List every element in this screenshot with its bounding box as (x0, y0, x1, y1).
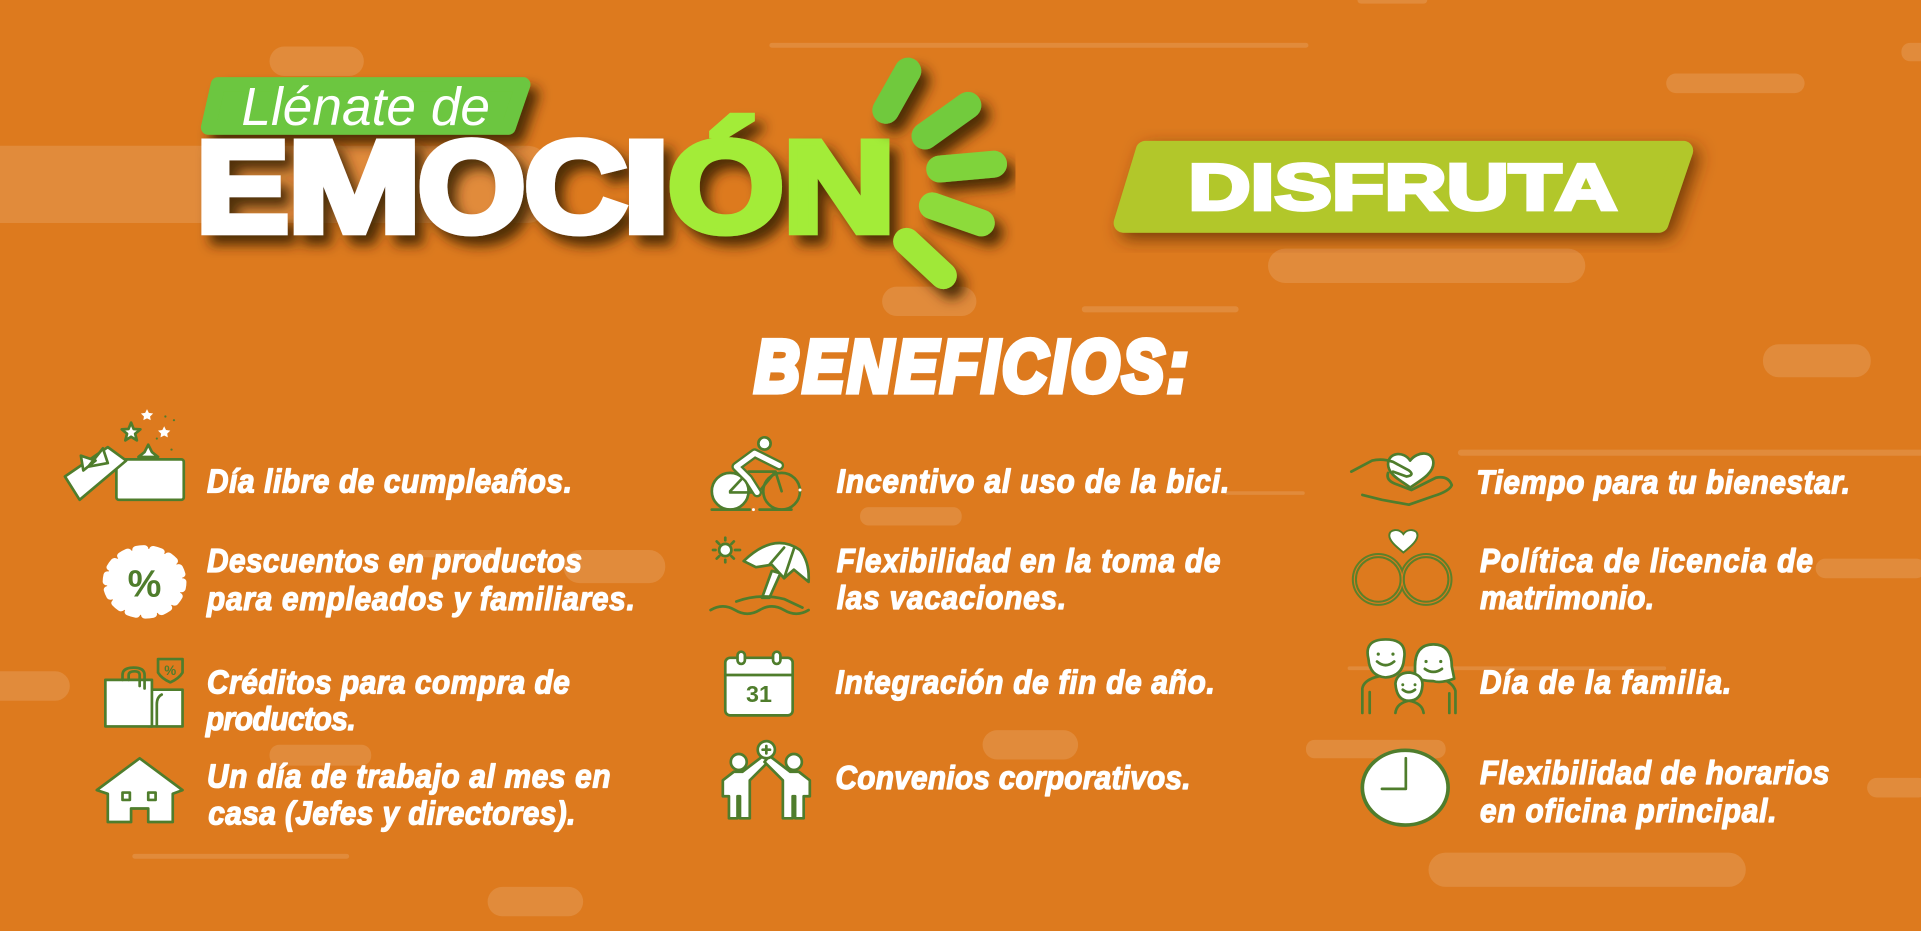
benefit: créditos (105, 659, 570, 737)
icon: percent badge: % (128, 564, 161, 606)
text: Convenios corporativos. (836, 759, 1191, 796)
text: casa (Jefes y directores). (208, 795, 575, 832)
wordmark: EMOCIÓN: C (524, 114, 627, 260)
icon: wedding rings with heart (1354, 530, 1450, 603)
benefit: vacaciones (711, 538, 1220, 616)
icon: heart in hand (1351, 454, 1452, 505)
text: Día de la familia. (1480, 664, 1731, 701)
wordmark: EMOCIÓN: M (288, 114, 421, 260)
text: Incentivo al uso de la bici. (837, 463, 1229, 500)
banner: Llénate de: Llénate de (241, 77, 490, 137)
icon: beach umbrella (711, 538, 809, 614)
icon: percent badge (107, 549, 182, 615)
text: productos. (205, 701, 356, 737)
benefit: bienestar (1351, 454, 1850, 505)
text: Un día de trabajo al mes en (207, 758, 611, 795)
text: Flexibilidad en la toma de (837, 543, 1220, 579)
icon: shopping bags (105, 659, 183, 726)
logo: Llénate de Emoción (196, 71, 994, 276)
text (206, 543, 635, 617)
benefit: convenios (723, 741, 1191, 818)
benefit: descuentos (107, 543, 635, 617)
text (1480, 755, 1829, 829)
text: Descuentos en productos (207, 543, 582, 579)
text (205, 664, 570, 737)
icon: house (97, 758, 183, 822)
benefit: horarios (1362, 750, 1829, 829)
wordmark: EMOCIÓN: E (196, 114, 289, 260)
text: matrimonio. (1480, 579, 1654, 616)
text: para empleados y familiares. (206, 581, 635, 617)
benefit: familia (1362, 639, 1731, 713)
icon: radiating rays (886, 71, 994, 276)
icon: family faces (1362, 639, 1455, 713)
text: Día libre de cumpleaños. (207, 463, 572, 500)
text: Tiempo para tu bienestar. (1476, 464, 1850, 501)
benefit: integración (725, 652, 1215, 715)
text: las vacaciones. (837, 579, 1066, 616)
text: Integración de fin de año. (836, 664, 1215, 701)
icon: shopping bags: % (164, 663, 176, 678)
text (1480, 543, 1813, 616)
wordmark: EMOCIÓN (196, 114, 896, 260)
text: en oficina principal. (1480, 793, 1777, 829)
benefit: trabajo en casa (97, 758, 611, 832)
wordmark: EMOCIÓN: Ó (668, 114, 784, 260)
text (207, 758, 611, 832)
text: Flexibilidad de horarios (1480, 755, 1829, 791)
wordmark: EMOCIÓN: N (783, 114, 896, 260)
wordmark: EMOCIÓN: I (622, 114, 670, 260)
icon: cyclist (712, 437, 801, 511)
icon: two people with raised hands (723, 741, 810, 818)
icon: open gift box (65, 409, 184, 500)
icon: calendar 31 (725, 652, 793, 715)
icon: clock (1362, 750, 1448, 825)
banner: DISFRUTA: DISFRUTA (1188, 150, 1617, 223)
banner: DISFRUTA (1123, 150, 1683, 223)
text: Créditos para compra de (207, 664, 570, 701)
icon: calendar 31: 31 (746, 681, 772, 707)
text (837, 543, 1220, 616)
benefit: bici (712, 437, 1229, 511)
benefit: matrimonio (1354, 530, 1813, 616)
benefit: cumpleaños (65, 409, 572, 500)
heading: BENEFICIOS: BENEFICIOS: (755, 326, 1188, 408)
text: Política de licencia de (1480, 543, 1813, 579)
wordmark: EMOCIÓN: O (418, 114, 526, 260)
